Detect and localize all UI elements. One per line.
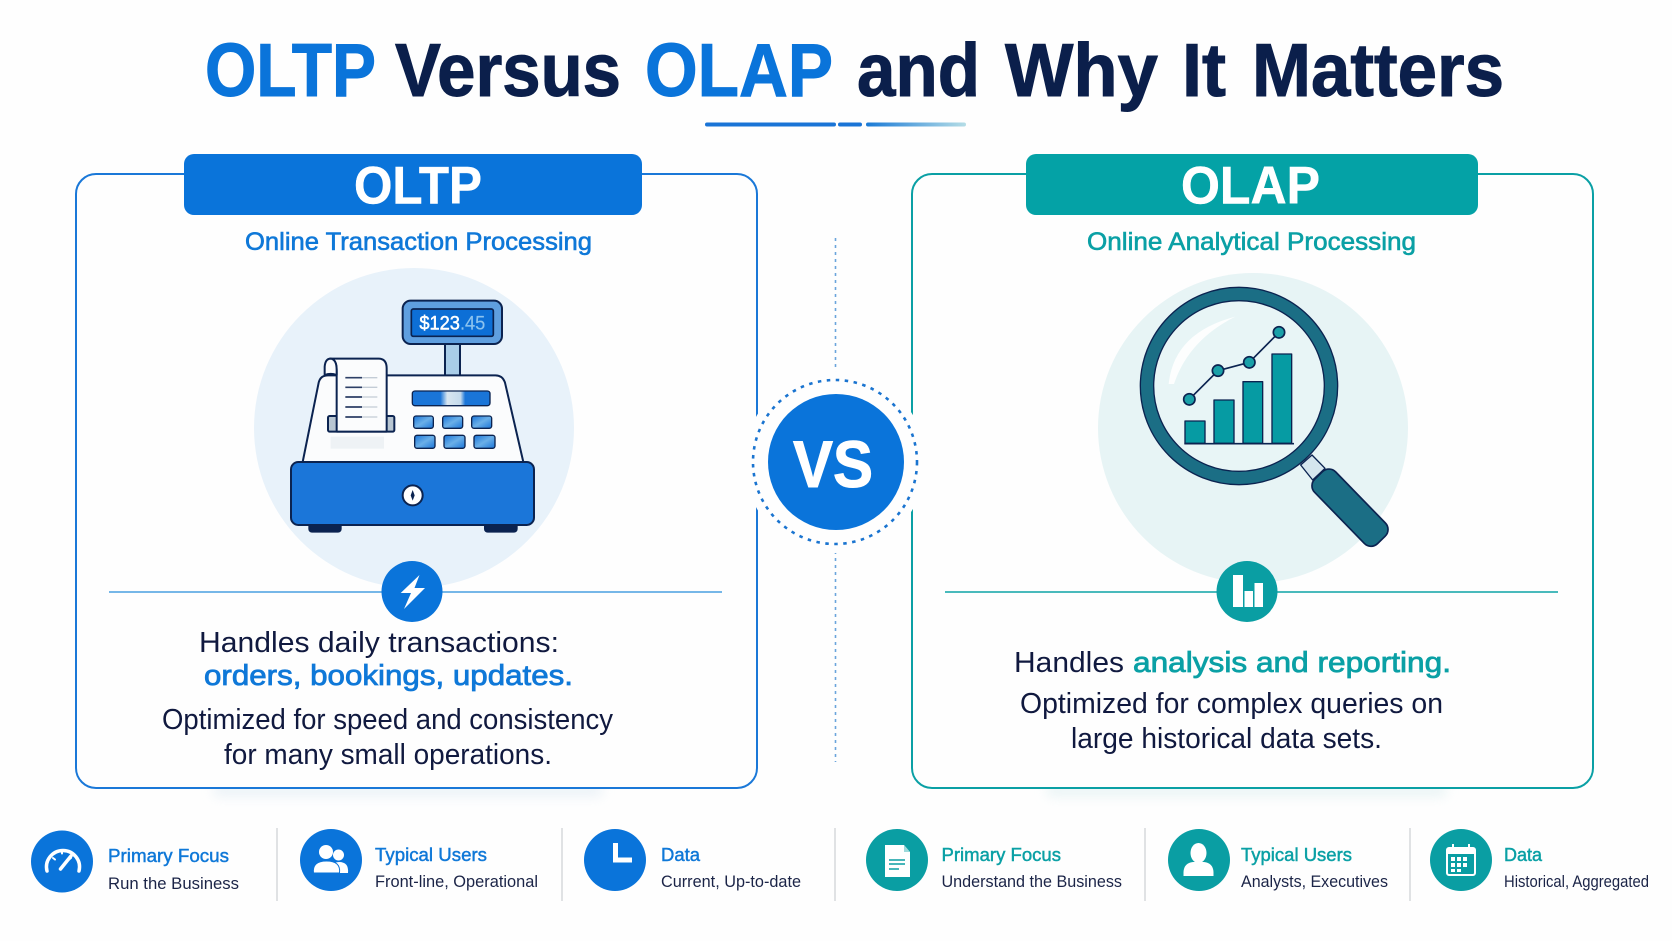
typical users item: Front-line, Operational: [375, 872, 538, 891]
OLAP description: Handles: [1014, 647, 1124, 679]
panel: OLAP: [912, 154, 1593, 796]
title: OLTP: [205, 28, 376, 112]
title: [205, 28, 1504, 112]
typical users item: Typical Users: [1241, 844, 1352, 865]
OLAP description: analysis and reporting.: [1133, 647, 1451, 679]
title: Why: [1005, 28, 1158, 112]
data item: [584, 829, 801, 891]
OLAP description: Optimized for complex queries on: [1020, 688, 1443, 720]
icon: background circle: [1098, 273, 1408, 583]
panel: OLTP: [76, 154, 757, 796]
primary focus item: Run the Business: [108, 874, 239, 893]
OLTP subtitle: Online Transaction Processing: [245, 228, 592, 256]
divider with chart badge: [945, 561, 1558, 622]
title: Versus: [395, 28, 621, 112]
title: It: [1182, 28, 1226, 112]
icon: document: [885, 845, 910, 877]
OLTP description: orders, bookings, updates.: [204, 660, 573, 692]
icon: bars: [1233, 575, 1263, 607]
data item: Data: [1504, 844, 1543, 865]
primary focus item: [866, 829, 1122, 891]
icon: gauge: [46, 850, 80, 871]
typical users item: [300, 829, 538, 891]
primary focus item: Primary Focus: [942, 844, 1061, 865]
icon: magnifier with chart: [1147, 294, 1392, 550]
center dotted divider: [834, 238, 836, 762]
OLTP description: [162, 627, 613, 771]
OLTP header tab: [184, 154, 642, 216]
OLAP header tab: [1026, 154, 1478, 216]
footer: OLTP attributes: [31, 828, 801, 901]
OLAP description: [1014, 647, 1451, 755]
title: Matters: [1252, 28, 1504, 112]
typical users item: Analysts, Executives: [1241, 872, 1388, 891]
primary focus item: [31, 830, 239, 893]
icon: person: [1184, 843, 1214, 876]
VS badge: VS: [793, 427, 873, 501]
icon: calendar: [1447, 844, 1475, 875]
footer: OLAP attributes: [866, 828, 1649, 901]
data item: Data: [661, 844, 701, 865]
OLAP header tab: OLAP: [1181, 156, 1320, 216]
OLTP description: for many small operations.: [224, 739, 552, 771]
OLAP subtitle: Online Analytical Processing: [1087, 228, 1416, 256]
icon: clock hands: [616, 843, 632, 860]
icon: users: [313, 845, 348, 873]
icon: background circle: [254, 268, 574, 588]
OLTP description: Handles daily transactions:: [199, 627, 559, 659]
data item: Current, Up-to-date: [661, 872, 801, 891]
VS badge: [744, 371, 926, 553]
icon: lightning bolt: [401, 575, 425, 609]
typical users item: [1168, 829, 1388, 891]
primary focus item: Primary Focus: [108, 845, 229, 866]
divider with bolt badge: [109, 561, 722, 622]
OLTP description: Optimized for speed and consistency: [162, 704, 613, 736]
icon: cash register: $123.45: [419, 312, 485, 334]
icon: cash register: [291, 301, 534, 532]
typical users item: Typical Users: [375, 844, 487, 865]
title: and: [857, 28, 980, 112]
title: OLAP: [645, 28, 833, 112]
data item: Historical, Aggregated: [1504, 872, 1649, 891]
data item: [1430, 829, 1649, 891]
OLTP header tab: OLTP: [354, 156, 482, 216]
primary focus item: Understand the Business: [942, 872, 1122, 891]
OLAP description: large historical data sets.: [1071, 723, 1382, 755]
